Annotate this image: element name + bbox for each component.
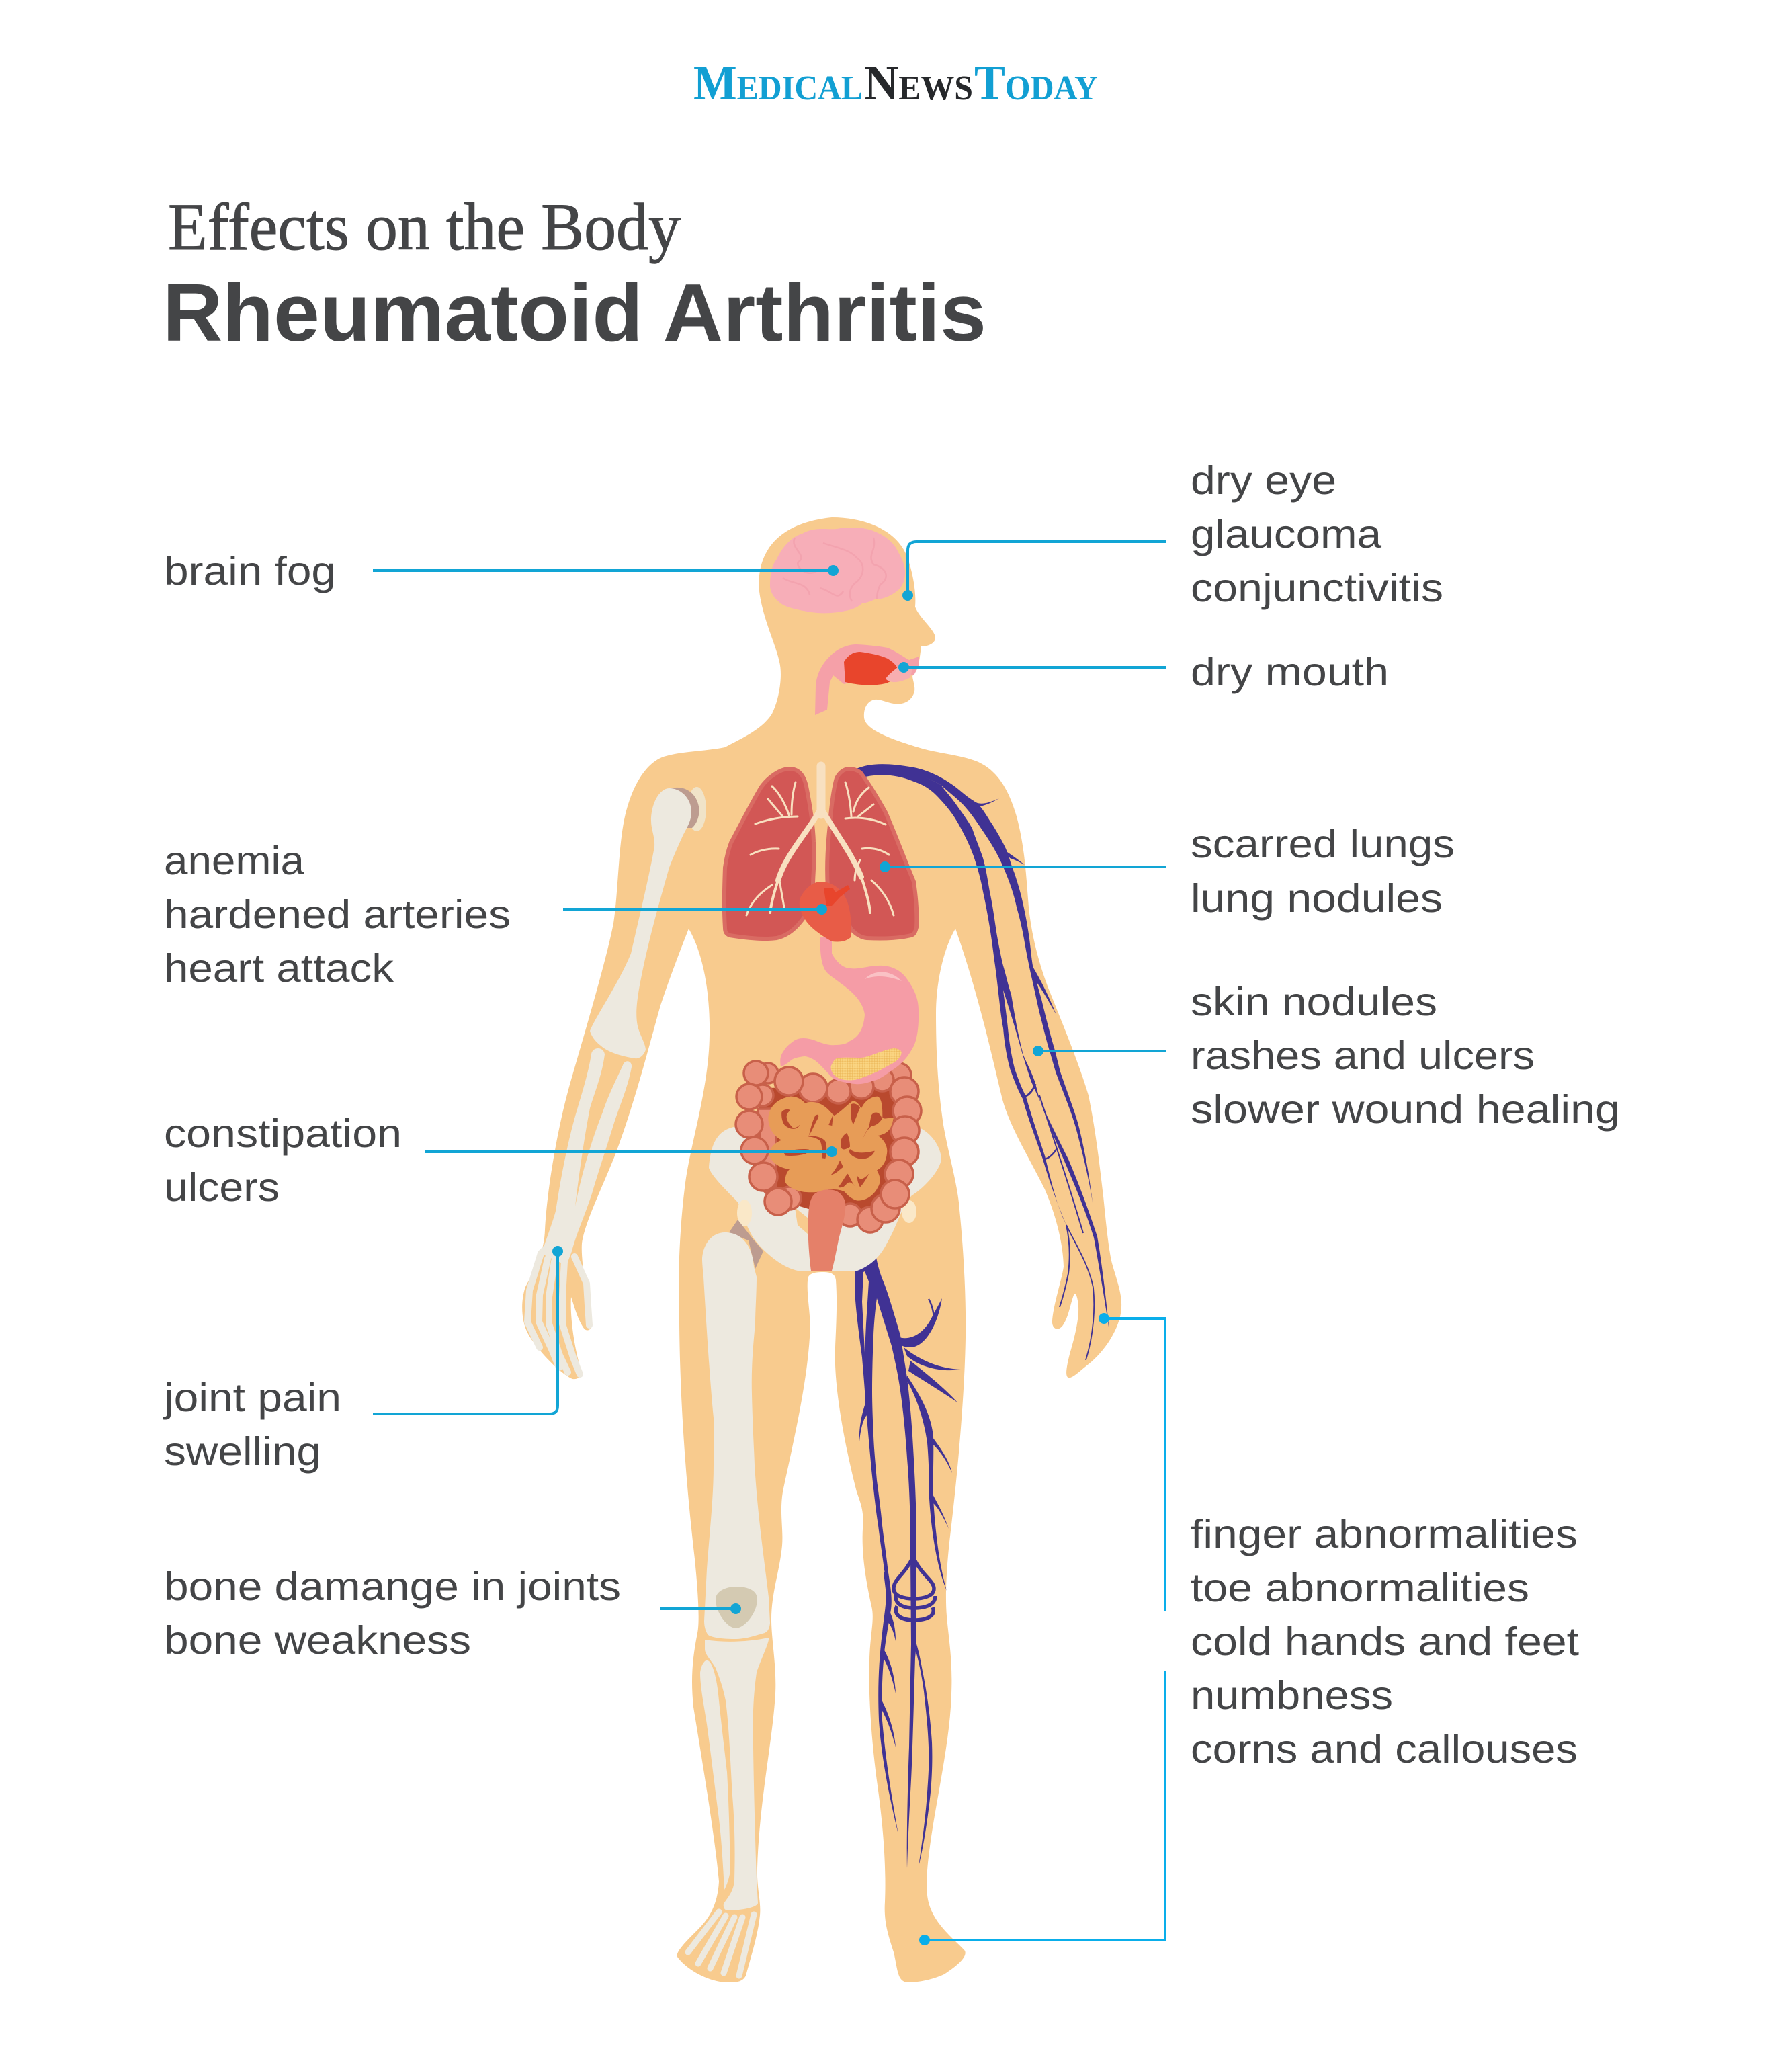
labels: blood and heart effects: hardened arteries bbox=[164, 892, 511, 937]
tibia bbox=[705, 1638, 769, 1910]
labels: bone effects: bone weakness bbox=[164, 1618, 471, 1663]
leader: eye bbox=[902, 542, 1166, 601]
logo: Medical News Today bbox=[693, 56, 1098, 111]
heart bbox=[800, 882, 851, 941]
labels: hand and foot effects: toe abnormalities bbox=[1191, 1566, 1529, 1610]
patella bbox=[716, 1587, 757, 1628]
labels: lung effects bbox=[1191, 822, 1455, 921]
leader: intestines bbox=[425, 1146, 837, 1157]
leader: skin bbox=[1033, 1046, 1166, 1056]
labels: lung effects: lung nodules bbox=[1191, 876, 1443, 921]
labels: mouth effects: dry mouth bbox=[1191, 650, 1389, 694]
labels: joint effects bbox=[163, 1376, 341, 1474]
labels: skin effects: rashes and ulcers bbox=[1191, 1034, 1535, 1078]
labels: lung effects: scarred lungs bbox=[1191, 822, 1455, 866]
lungs bbox=[724, 769, 916, 939]
fibula bbox=[700, 1660, 730, 1890]
pelvis joint highlights bbox=[737, 1200, 916, 1226]
body illustration bbox=[522, 517, 1121, 1982]
labels: blood and heart effects: anemia bbox=[164, 839, 304, 883]
labels: bone effects: bone damange in joints bbox=[164, 1564, 621, 1609]
heading: Effects on the Body: Effects on the Body bbox=[168, 190, 681, 264]
labels: eye effects: conjunctivitis bbox=[1191, 566, 1443, 610]
leader: brain fog bbox=[373, 565, 839, 576]
labels: digestive effects bbox=[164, 1111, 402, 1210]
logo: Medical News Today: News bbox=[864, 56, 973, 111]
leader: joints bbox=[373, 1246, 563, 1414]
labels: skin effects: skin nodules bbox=[1191, 980, 1437, 1024]
small intestine bbox=[768, 1097, 894, 1201]
labels: skin effects bbox=[1191, 980, 1620, 1132]
labels: joint effects: swelling bbox=[164, 1429, 321, 1474]
labels: eye effects: dry eye bbox=[1191, 458, 1336, 503]
hand bones bbox=[527, 1253, 589, 1374]
leader: heart bbox=[563, 904, 827, 915]
humerus bbox=[590, 788, 691, 1058]
body silhouette bbox=[522, 517, 1121, 1982]
logo: Medical News Today: Today bbox=[974, 56, 1098, 111]
pelvis bbox=[709, 1127, 941, 1271]
shoulder joint bbox=[671, 787, 706, 831]
skeleton: arm, pelvis and leg bones bbox=[527, 787, 941, 1976]
labels: digestive effects: constipation bbox=[164, 1111, 402, 1156]
labels: eye effects: glaucoma bbox=[1191, 512, 1381, 556]
labels: hand and foot effects: numbness bbox=[1191, 1673, 1393, 1718]
labels: skin effects: slower wound healing bbox=[1191, 1087, 1620, 1132]
mouth and throat bbox=[815, 644, 919, 715]
large intestine bbox=[736, 1061, 921, 1232]
stomach and esophagus bbox=[780, 937, 919, 1084]
veins: arm bbox=[853, 764, 1109, 1360]
leader: hands bbox=[1099, 1313, 1165, 1611]
labels: hand and foot effects: finger abnormalities bbox=[1191, 1512, 1578, 1556]
brain bbox=[770, 528, 905, 613]
veins: leg bbox=[855, 1250, 961, 1868]
labels: joint effects: joint pain bbox=[163, 1376, 341, 1420]
bronchial tree bbox=[746, 766, 894, 915]
title: Rheumatoid Arthritis: Rheumatoid Arthritis bbox=[163, 267, 986, 358]
forearm bones bbox=[538, 1048, 632, 1265]
leader: lungs bbox=[880, 861, 1166, 872]
labels: bone effects bbox=[164, 1564, 621, 1663]
labels: brain fog: brain fog bbox=[164, 549, 336, 593]
foot bones bbox=[688, 1912, 754, 1976]
labels: blood and heart effects bbox=[164, 839, 511, 991]
labels: digestive effects: ulcers bbox=[164, 1165, 280, 1210]
pelvis skin gap bbox=[795, 1208, 808, 1234]
labels: eye effects bbox=[1191, 458, 1443, 610]
logo: Medical News Today: Medical bbox=[693, 56, 863, 111]
labels: hand and foot effects: cold hands and feet bbox=[1191, 1620, 1579, 1664]
leader: feet bbox=[919, 1671, 1165, 1945]
pancreas bbox=[831, 1048, 902, 1080]
leader lines and dots bbox=[373, 542, 1166, 1945]
labels: hand and foot effects: corns and callouses bbox=[1191, 1727, 1578, 1771]
leader: bones bbox=[660, 1603, 741, 1614]
femur bbox=[702, 1232, 770, 1639]
leader: mouth bbox=[898, 662, 1166, 673]
rectum bbox=[808, 1189, 845, 1271]
labels: blood and heart effects: heart attack bbox=[164, 946, 394, 991]
labels: hand and foot effects bbox=[1191, 1512, 1579, 1771]
hip connector bbox=[729, 1220, 763, 1269]
